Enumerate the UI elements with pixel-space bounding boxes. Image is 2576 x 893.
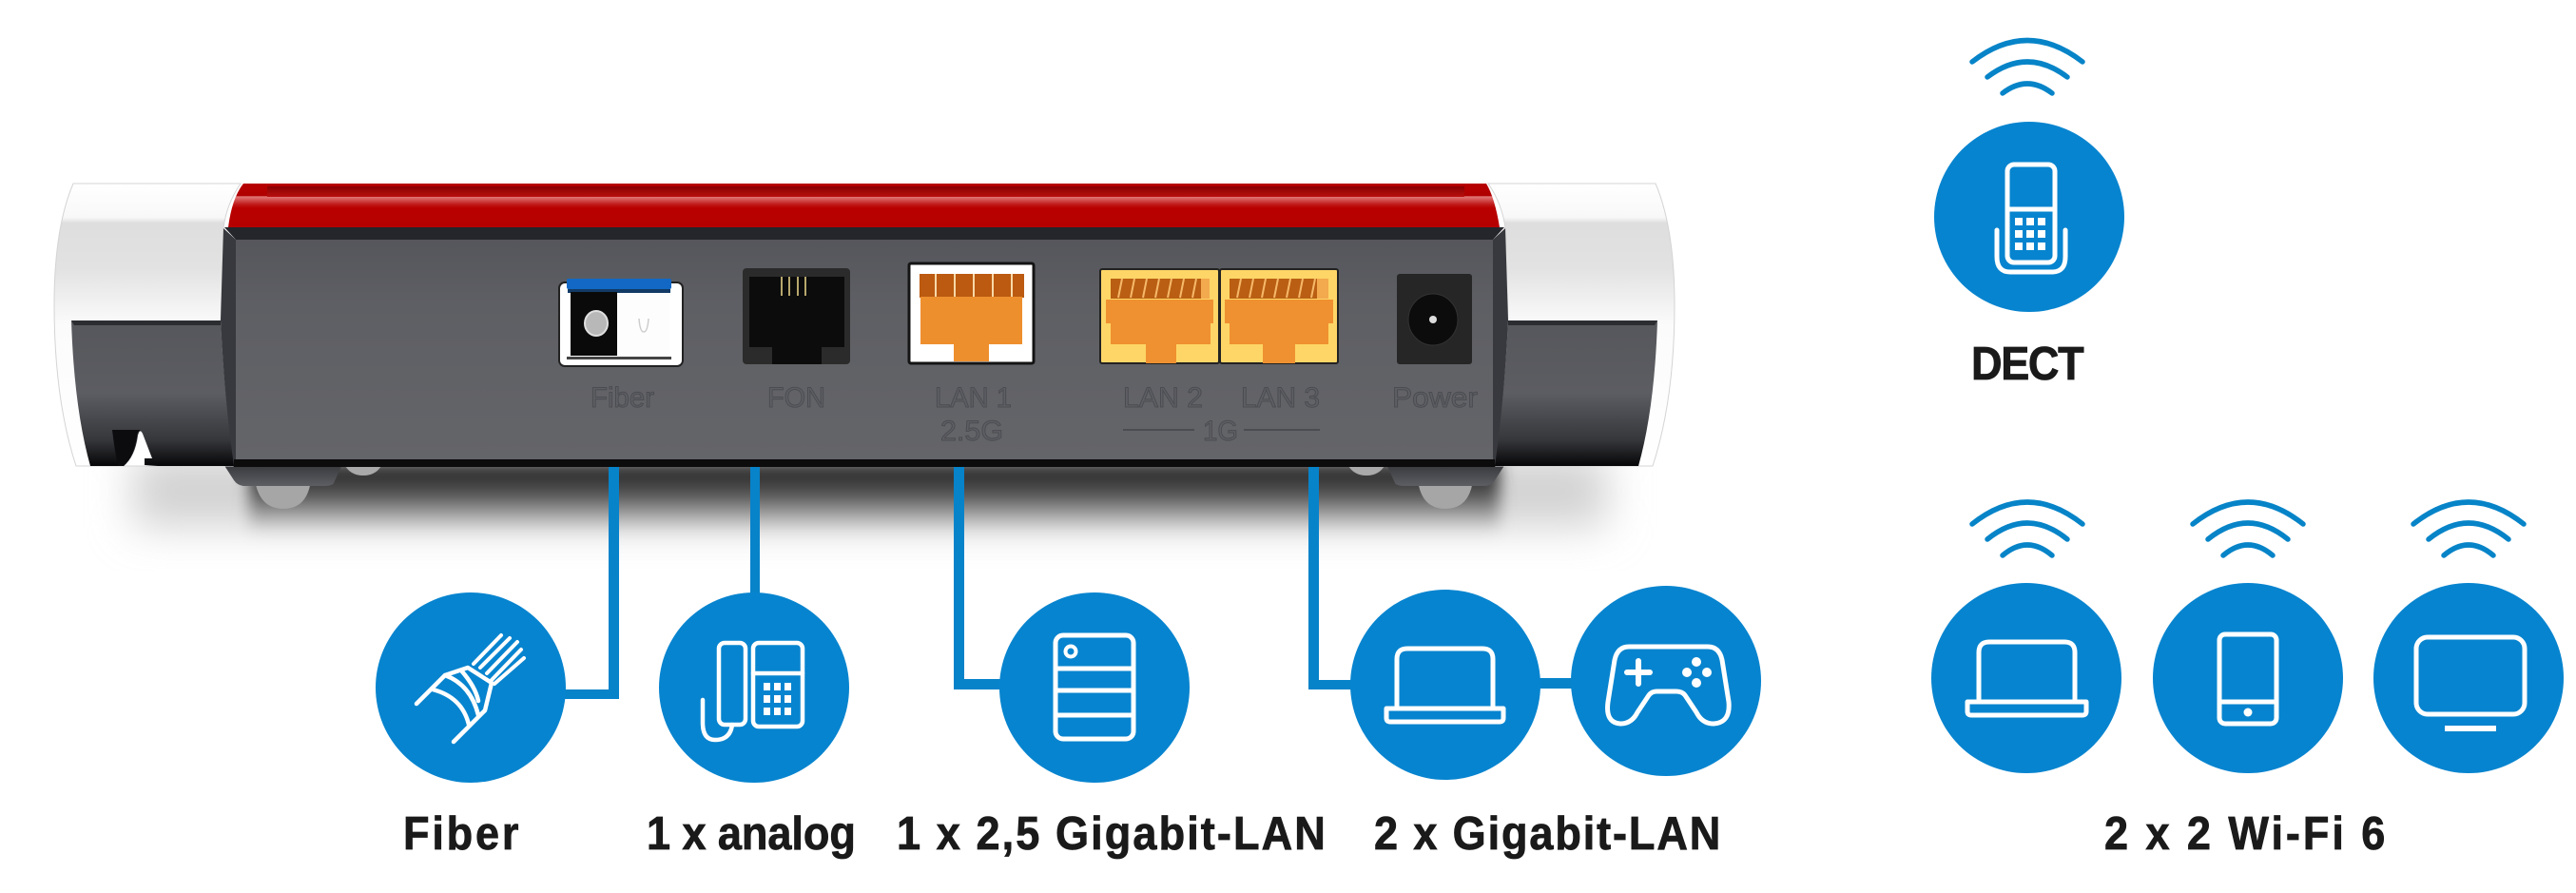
red top panel bbox=[228, 184, 1500, 227]
port: LAN 1 bbox=[909, 263, 1034, 363]
embossed port labels: LAN 1 bbox=[935, 382, 1012, 414]
icon: network storage bbox=[999, 592, 1190, 783]
icon: Wi-Fi laptop bbox=[1931, 583, 2121, 773]
label: DECT: DECT bbox=[1971, 337, 2084, 389]
router back panel bbox=[221, 227, 1508, 467]
embossed port labels: FON bbox=[767, 382, 825, 414]
router bbox=[54, 184, 1675, 509]
embossed port labels: 2.5G bbox=[940, 416, 1003, 447]
icon: Wi-Fi smartphone bbox=[2153, 583, 2343, 773]
icon: Wi-Fi phone arcs bbox=[2193, 502, 2303, 555]
label: 2 x 2 Wi-Fi 6: 2 x 2 Wi-Fi 6 bbox=[2104, 806, 2385, 859]
icon: desk phone bbox=[659, 592, 849, 783]
embossed port labels bbox=[591, 382, 1478, 447]
icon: fiber cable bbox=[376, 592, 566, 783]
label: 1 x analog: 1 x analog bbox=[647, 806, 856, 859]
port: fiber bbox=[559, 279, 683, 366]
port: LAN 3 bbox=[1220, 269, 1338, 363]
icon: DECT handset bbox=[1934, 122, 2124, 312]
left end cap bbox=[54, 184, 241, 466]
icon: DECT wireless arcs bbox=[1972, 40, 2082, 93]
label: 1 x 2,5 Gigabit-LAN: 1 x 2,5 Gigabit-LAN bbox=[897, 806, 1326, 859]
connector lines bbox=[561, 467, 1576, 699]
icon: Wi-Fi monitor bbox=[2373, 583, 2564, 773]
right end cap bbox=[1488, 184, 1675, 466]
router feet bbox=[223, 464, 1505, 509]
icon: Wi-Fi monitor arcs bbox=[2413, 502, 2524, 555]
icon: gamepad bbox=[1571, 586, 1761, 776]
port: power bbox=[1397, 274, 1472, 364]
label: 2 x Gigabit-LAN: 2 x Gigabit-LAN bbox=[1374, 806, 1720, 859]
icon: Wi-Fi laptop arcs bbox=[1972, 502, 2082, 555]
embossed port labels: LAN 3 bbox=[1241, 382, 1320, 414]
icon: laptop bbox=[1350, 590, 1540, 780]
embossed port labels: LAN 2 bbox=[1123, 382, 1203, 414]
embossed port labels: Fiber bbox=[591, 382, 654, 414]
port: FON bbox=[743, 268, 850, 364]
label: Fiber: Fiber bbox=[403, 806, 518, 859]
embossed port labels: Power bbox=[1392, 382, 1478, 414]
embossed port labels: 1G bbox=[1203, 416, 1238, 447]
port: LAN 2 bbox=[1100, 269, 1219, 363]
router shadow bbox=[133, 455, 1607, 538]
